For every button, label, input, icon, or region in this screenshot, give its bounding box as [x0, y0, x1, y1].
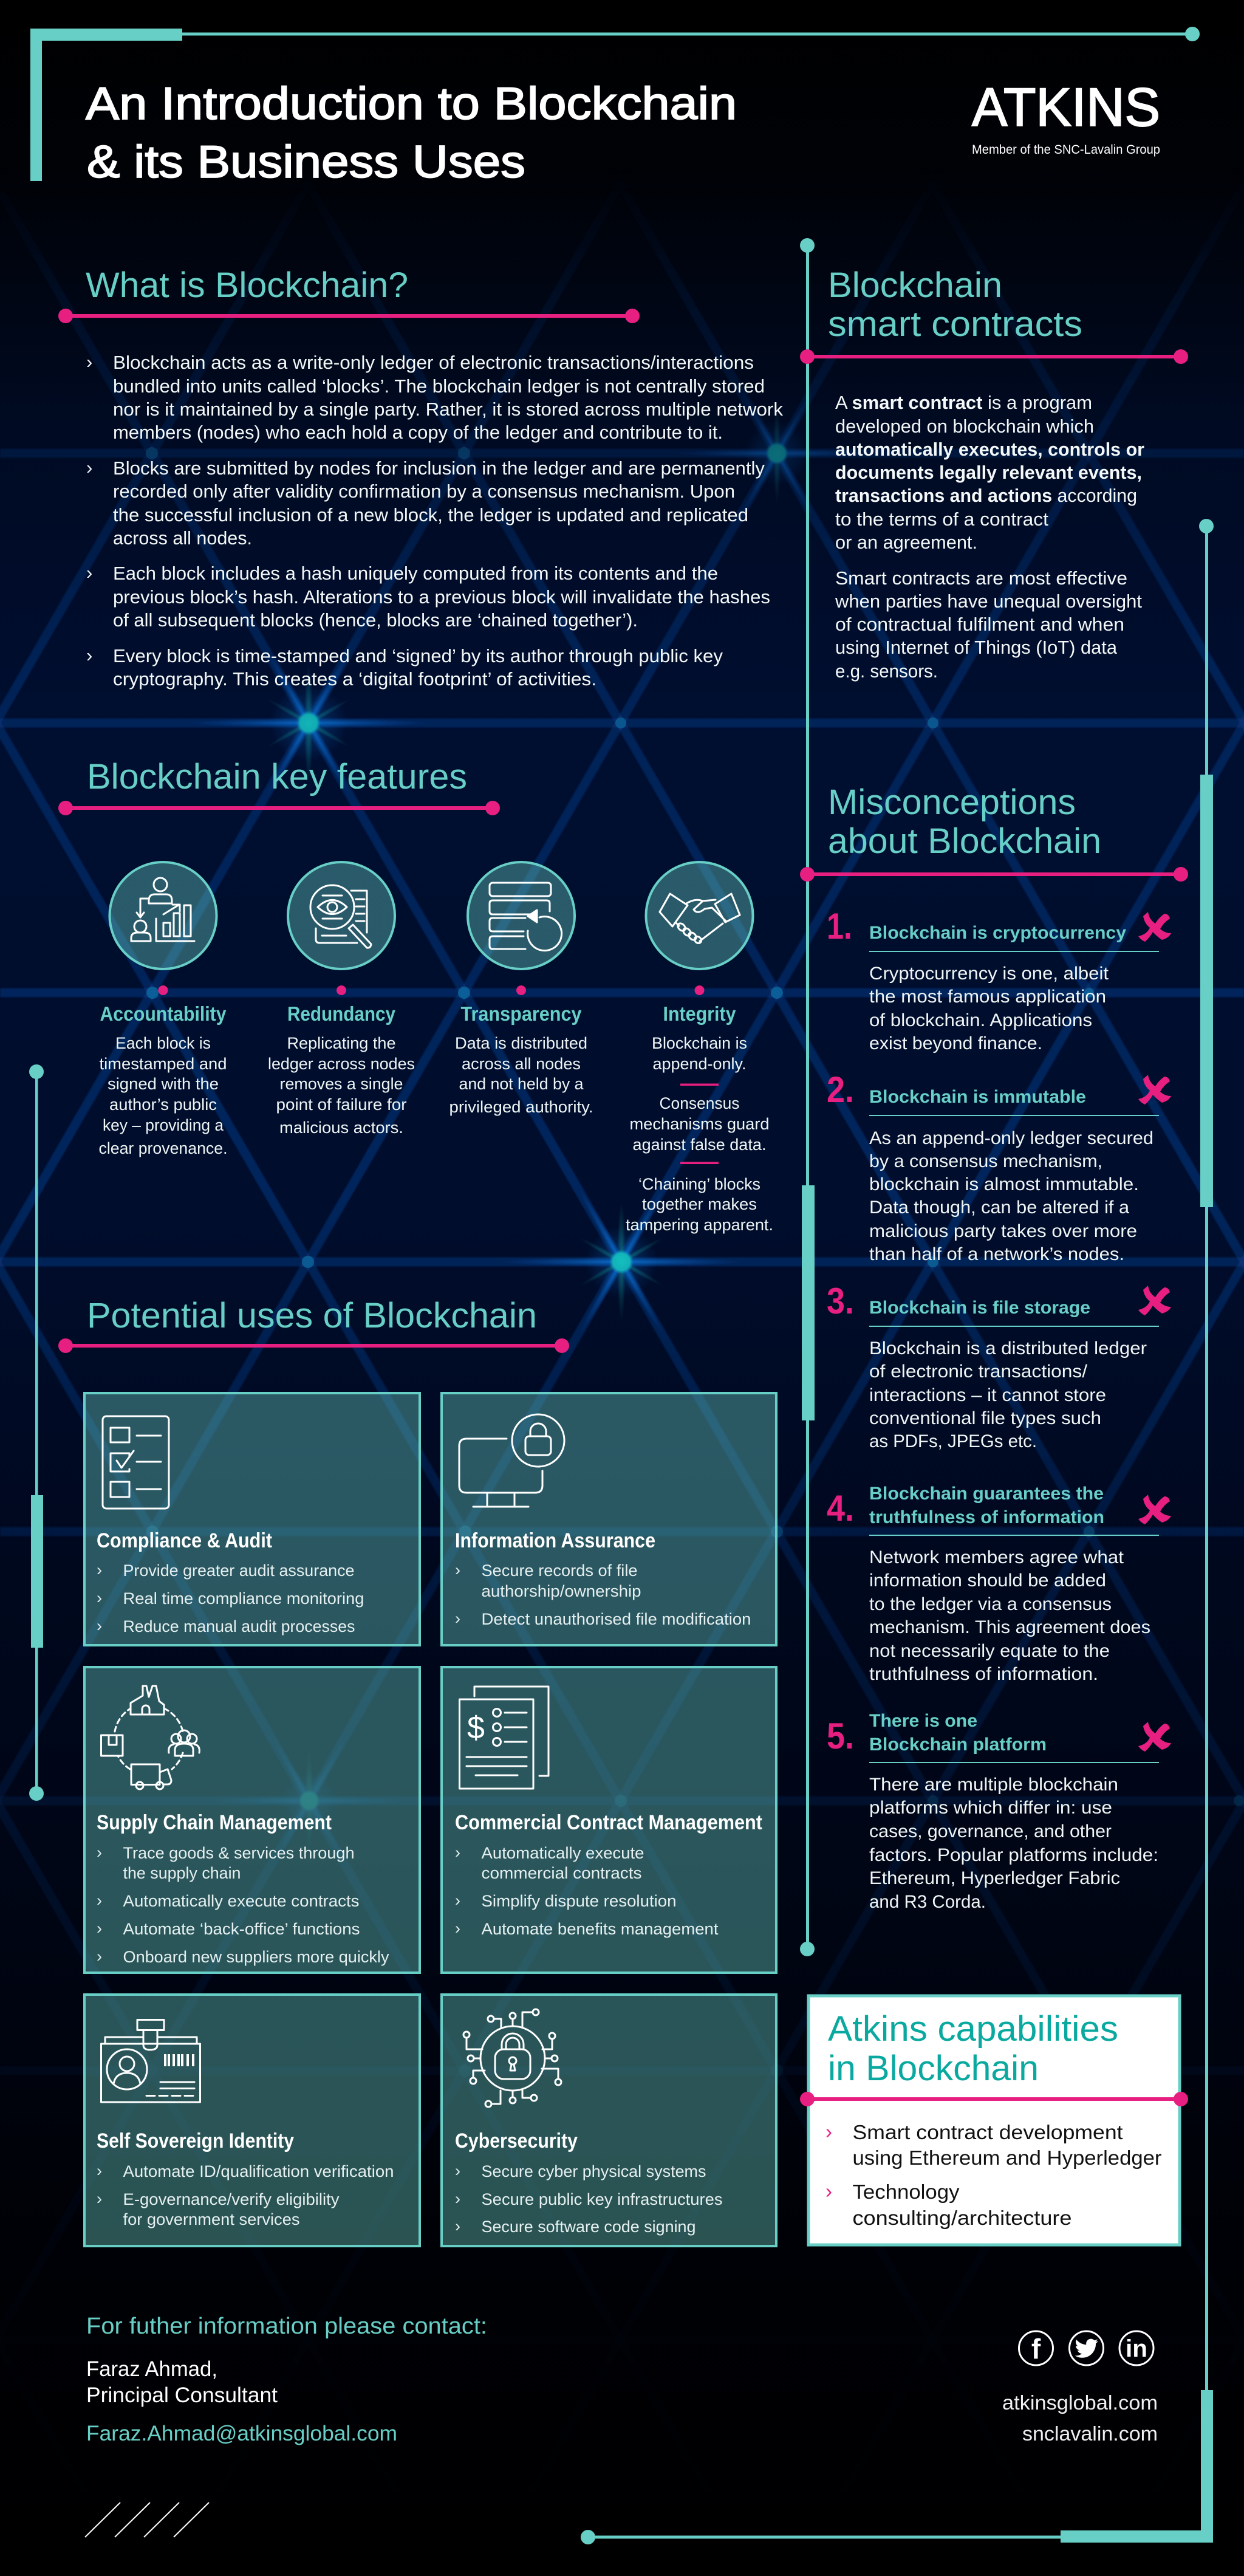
icon: cross	[1138, 1286, 1171, 1315]
item text: interactions – it cannot store	[869, 1385, 1106, 1405]
item text	[869, 1775, 1158, 1912]
number: 3.	[827, 1281, 854, 1321]
icon: accountability circle	[109, 862, 216, 969]
decorative slashes	[85, 2502, 209, 2537]
icon: monitor with lock	[459, 1414, 564, 1507]
item text: not necessarily equate to the	[869, 1641, 1110, 1661]
list: ›	[97, 2190, 102, 2208]
title: Cybersecurity	[455, 2129, 578, 2153]
list: Secure software code signing	[481, 2218, 696, 2236]
list: Secure cyber physical systems	[481, 2162, 706, 2180]
misconception 5	[827, 1711, 1171, 1912]
marker dot	[158, 985, 168, 995]
feature: Integrity	[626, 862, 773, 1234]
item text: mechanism. This agreement does	[869, 1617, 1150, 1637]
text block: smart contracts: automatically executes, controls or	[835, 439, 1144, 460]
text block: What is Blockchain: ›	[86, 562, 92, 583]
list: Reduce manual audit processes	[123, 1617, 355, 1636]
text block: timestamped and	[100, 1055, 227, 1073]
item heading	[869, 1711, 1047, 1755]
text block: author’s public	[109, 1095, 217, 1114]
text block: tampering apparent.	[626, 1216, 773, 1234]
title: Self Sovereign Identity	[97, 2129, 294, 2153]
frame: bottom right corner and line	[581, 2390, 1213, 2544]
rule: key features	[58, 801, 500, 815]
list	[455, 2162, 723, 2236]
text block: smart contracts: transactions and actions according	[835, 485, 1137, 506]
title: Redundancy	[287, 1002, 396, 1025]
text block: smart contracts: or an agreement.	[835, 532, 977, 553]
text block: across all nodes	[462, 1055, 581, 1073]
list: Automatically execute	[481, 1844, 644, 1862]
marker dot	[695, 985, 705, 995]
contact name	[86, 2357, 278, 2407]
icon: cross	[1138, 912, 1171, 942]
logo: Atkins: ATKINS	[972, 77, 1160, 137]
heading	[828, 2009, 1118, 2088]
number: 4.	[827, 1488, 854, 1529]
text block: What is Blockchain: recorded only after validity confirmation by a consensus mechanism. Upon	[113, 481, 735, 502]
rule: smart contracts	[800, 349, 1188, 364]
list: Real time compliance monitoring	[123, 1589, 364, 1608]
item text	[869, 964, 1109, 1053]
list: ›	[97, 1617, 102, 1635]
title: Compliance & Audit	[97, 1529, 272, 1552]
item text: information should be added	[869, 1571, 1106, 1591]
text block: ledger across nodes	[268, 1055, 415, 1073]
heading: Potential uses of Blockchain: Potential uses of Blockchain	[87, 1296, 537, 1335]
web addresses	[1002, 2391, 1158, 2445]
text block: smart contracts: developed on blockchain which	[835, 416, 1094, 437]
heading: What is Blockchain?: What is Blockchain?	[86, 265, 408, 305]
title: An Introduction to Blockchain	[86, 78, 737, 129]
list: authorship/ownership	[481, 1582, 641, 1600]
panel: Compliance & Audit	[84, 1393, 420, 1645]
item text: blockchain is almost immutable.	[869, 1174, 1139, 1194]
text block: append-only.	[652, 1055, 746, 1073]
text block: point of failure for	[276, 1095, 407, 1114]
text block: smart contracts	[835, 392, 1144, 682]
text block	[449, 1034, 593, 1116]
list: ›	[97, 1843, 102, 1862]
text block: What is Blockchain: Blockchain acts as a write-only ledger of electronic transactions/interactions	[113, 352, 754, 373]
list: Smart contract development	[853, 2121, 1123, 2143]
heading: Blockchain smart contracts	[828, 265, 1082, 344]
contact block	[86, 2314, 487, 2445]
list: ›	[455, 1561, 460, 1579]
icon: contract document	[459, 1687, 549, 1789]
text block: What is Blockchain: ›	[86, 351, 92, 372]
contact heading: For futher information please contact:	[86, 2314, 487, 2339]
icon: checklist	[103, 1416, 169, 1509]
list: Automatically execute contracts	[123, 1892, 360, 1910]
item text: Cryptocurrency is one, albeit	[869, 964, 1109, 984]
icon: linkedin	[1119, 2331, 1153, 2365]
text block	[268, 1034, 415, 1137]
icon: circuit padlock	[463, 2009, 561, 2107]
item text: the most famous application	[869, 987, 1106, 1007]
text block: key – providing a	[103, 1116, 224, 1134]
icon: facebook: f	[1031, 2333, 1041, 2365]
text block: What is Blockchain	[86, 351, 784, 690]
item heading: Blockchain is cryptocurrency	[869, 923, 1126, 943]
icon: transparency circle	[468, 862, 575, 969]
misconception 3	[827, 1281, 1171, 1451]
number: 1.	[827, 906, 852, 947]
misconception 4	[827, 1484, 1171, 1684]
rule: potential uses	[58, 1338, 569, 1353]
list: ›	[97, 1589, 102, 1607]
item heading	[869, 1484, 1104, 1527]
text block: signed with the	[108, 1075, 219, 1093]
text block: smart contracts: documents legally relevant events,	[835, 462, 1142, 483]
item text: Ethereum, Hyperledger Fabric	[869, 1868, 1120, 1888]
icon: cross	[1138, 1075, 1171, 1105]
item text	[869, 1338, 1147, 1451]
item text: and R3 Corda.	[869, 1892, 986, 1912]
list: ›	[455, 2190, 460, 2208]
contact name: Principal Consultant	[86, 2383, 278, 2407]
side line: right column left rail	[800, 238, 815, 1956]
item heading: Blockchain guarantees the	[869, 1484, 1104, 1504]
item text	[869, 1128, 1153, 1264]
list: Automate ‘back-office’ functions	[123, 1920, 360, 1938]
item text: by a consensus mechanism,	[869, 1151, 1102, 1171]
list: ›	[455, 1919, 460, 1937]
heading: Misconceptions about Blockchain	[828, 783, 1101, 861]
list: Automate ID/qualification verification	[123, 2162, 394, 2180]
list: ›	[97, 1947, 102, 1965]
icon: supply chain cycle	[101, 1686, 199, 1789]
feature: Transparency	[449, 862, 593, 1116]
item text: Network members agree what	[869, 1547, 1124, 1567]
list: for government services	[123, 2210, 300, 2228]
misconception 2	[827, 1069, 1171, 1264]
icon: cross	[1138, 1495, 1171, 1524]
title: Transparency	[460, 1002, 582, 1025]
frame: top left corner and line	[30, 27, 1200, 181]
title: Information Assurance	[455, 1529, 655, 1552]
text block: What is Blockchain: nor is it maintained by a single party. Rather, it is stored across multiple network	[113, 399, 784, 420]
text block: What is Blockchain: Every block is time-stamped and ‘signed’ by its author through public key	[113, 645, 723, 666]
icon: redundancy circle	[288, 862, 395, 969]
list: Simplify dispute resolution	[481, 1892, 677, 1910]
text block: What is Blockchain: Each block includes a hash uniquely computed from its contents and the	[113, 563, 718, 584]
side line: left rail	[29, 1064, 44, 1801]
number: 2.	[827, 1069, 854, 1110]
list: ›	[97, 2162, 102, 2180]
list	[825, 2120, 1161, 2229]
list: the supply chain	[123, 1864, 241, 1882]
list: ›	[455, 2217, 460, 2235]
item heading: Blockchain is file storage	[869, 1298, 1090, 1318]
list: Detect unauthorised file modification	[481, 1610, 751, 1628]
item text: cases, governance, and other	[869, 1821, 1112, 1841]
rule: misconceptions	[800, 867, 1188, 882]
text block: smart contracts: A smart contract is a program	[835, 392, 1092, 413]
item text: exist beyond finance.	[869, 1033, 1042, 1053]
text block: What is Blockchain: bundled into units called ‘blocks’. The blockchain ledger is not centrally stored	[113, 375, 765, 397]
list: ›	[455, 1609, 460, 1628]
contact name: Faraz Ahmad,	[86, 2357, 217, 2381]
misconception 1	[827, 906, 1171, 1053]
feature: Accountability	[98, 862, 227, 1157]
logo: Atkins: Member of the SNC-Lavalin Group	[972, 143, 1160, 157]
list: E-governance/verify eligibility	[123, 2190, 340, 2208]
text block: What is Blockchain: members (nodes) who each hold a copy of the ledger and contribute to it.	[113, 422, 723, 443]
item text: than half of a network’s nodes.	[869, 1244, 1124, 1264]
heading: in Blockchain	[828, 2049, 1039, 2088]
panel: Self Sovereign Identity	[84, 1995, 420, 2246]
web addresses: atkinsglobal.com	[1002, 2391, 1158, 2414]
heading: Blockchain key features: Blockchain key features	[87, 757, 467, 796]
marker dot	[337, 985, 346, 995]
web addresses: snclavalin.com	[1022, 2422, 1158, 2445]
text block: What is Blockchain: the successful inclusion of a new block, the ledger is updated and replicated	[113, 504, 748, 526]
item heading: Blockchain is immutable	[869, 1087, 1086, 1107]
list: ›	[97, 1561, 102, 1579]
item heading: Blockchain platform	[869, 1735, 1047, 1755]
list	[455, 1561, 751, 1628]
text block: smart contracts: to the terms of a contract	[835, 509, 1048, 530]
rule: What is Blockchain	[58, 309, 640, 323]
heading: Misconceptions about Blockchain: Misconceptions	[828, 783, 1076, 822]
item text	[869, 1547, 1150, 1684]
text block: malicious actors.	[279, 1118, 403, 1137]
text block: What is Blockchain: previous block’s hash. Alterations to a previous block will invalidate the hashes	[113, 586, 770, 608]
panel: Information Assurance	[442, 1393, 776, 1645]
text block: smart contracts: of contractual fulfilment and when	[835, 614, 1124, 635]
icon: twitter	[1069, 2331, 1103, 2365]
background: star glints	[187, 388, 880, 1866]
list: commercial contracts	[481, 1864, 641, 1882]
text block: Replicating the	[287, 1034, 396, 1052]
panel: Commercial Contract Management	[442, 1667, 776, 1973]
text block: smart contracts: when parties have unequal oversight	[835, 591, 1142, 612]
contact email: Faraz.Ahmad@atkinsglobal.com	[86, 2422, 397, 2445]
text block: ‘Chaining’ blocks	[638, 1175, 760, 1193]
text block: mechanisms guard	[629, 1115, 769, 1133]
list	[97, 1561, 364, 1636]
item text: of blockchain. Applications	[869, 1010, 1092, 1030]
icon: facebook	[1019, 2331, 1053, 2365]
text block: What is Blockchain: Blocks are submitted by nodes for inclusion in the ledger and are permanently	[113, 457, 765, 479]
list	[97, 1843, 389, 1966]
icon: id card	[101, 2019, 200, 2102]
text block: clear provenance.	[98, 1139, 227, 1157]
heading: Blockchain smart contracts: smart contracts	[828, 304, 1082, 344]
text block: Data is distributed	[455, 1034, 587, 1052]
item heading: There is one	[869, 1711, 977, 1731]
list	[455, 1843, 719, 1938]
list: ›	[825, 2180, 832, 2202]
list: Trace goods & services through	[123, 1844, 355, 1862]
text block: Blockchain is	[652, 1034, 747, 1052]
title: & its Business Uses	[87, 136, 525, 187]
heading: Atkins capabilities	[828, 2009, 1118, 2049]
text block: What is Blockchain: of all subsequent blocks (hence, blocks are ‘chained together’).	[113, 609, 638, 631]
text block: What is Blockchain: cryptography. This creates a ‘digital footprint’ of activities.	[113, 668, 596, 690]
text block: removes a single	[279, 1075, 403, 1093]
panel: Atkins capabilities	[800, 1996, 1188, 2245]
title	[86, 78, 737, 187]
item text: platforms which differ in: use	[869, 1798, 1112, 1818]
panel: Cybersecurity	[442, 1995, 776, 2246]
number: 5.	[827, 1716, 854, 1756]
item heading: truthfulness of information	[869, 1507, 1104, 1527]
list: Secure public key infrastructures	[481, 2190, 723, 2208]
title: Accountability	[100, 1002, 227, 1025]
text block: smart contracts: e.g. sensors.	[835, 660, 938, 682]
heading: Blockchain smart contracts: Blockchain	[828, 265, 1002, 305]
list	[97, 2162, 394, 2228]
list: Automate benefits management	[481, 1920, 719, 1938]
list: ›	[455, 1843, 460, 1862]
text block	[98, 1034, 227, 1157]
list: ›	[97, 1919, 102, 1937]
list: ›	[825, 2120, 832, 2143]
text block: together makes	[642, 1195, 757, 1213]
item text: malicious party takes over more	[869, 1221, 1137, 1241]
list: consulting/architecture	[853, 2207, 1071, 2229]
title: Commercial Contract Management	[455, 1811, 762, 1834]
text block	[626, 1034, 773, 1234]
text block: against false data.	[633, 1136, 767, 1154]
item text: Data though, can be altered if a	[869, 1197, 1129, 1218]
item text: factors. Popular platforms include:	[869, 1845, 1158, 1865]
list: ›	[455, 1891, 460, 1910]
item text: truthfulness of information.	[869, 1664, 1098, 1684]
item text: conventional file types such	[869, 1408, 1101, 1428]
text block: What is Blockchain: ›	[86, 457, 92, 478]
icon: integrity circle	[646, 862, 753, 969]
list: Provide greater audit assurance	[123, 1561, 355, 1580]
text block: Each block is	[115, 1034, 211, 1052]
list: using Ethereum and Hyperledger	[853, 2146, 1161, 2169]
title: Supply Chain Management	[97, 1811, 332, 1834]
item text: to the ledger via a consensus	[869, 1594, 1112, 1614]
text block: What is Blockchain: ›	[86, 645, 92, 666]
item text: As an append-only ledger secured	[869, 1128, 1153, 1148]
list: Secure records of file	[481, 1561, 638, 1580]
text block: smart contracts: using Internet of Things (IoT) data	[835, 637, 1118, 658]
side line: right edge rail	[1199, 519, 1214, 2410]
marker dot	[516, 985, 526, 995]
list: ›	[97, 1891, 102, 1910]
text block: and not held by a	[459, 1075, 584, 1093]
title: Integrity	[663, 1002, 736, 1025]
text block: privileged authority.	[449, 1098, 593, 1116]
background: triangle network	[0, 234, 1244, 2152]
social icons	[1019, 2331, 1153, 2365]
text block: Consensus	[660, 1094, 740, 1112]
panel: Supply Chain Management	[84, 1667, 420, 1973]
item text: There are multiple blockchain	[869, 1775, 1118, 1795]
feature: Redundancy	[268, 862, 415, 1137]
heading: Misconceptions about Blockchain: about Blockchain	[828, 821, 1101, 861]
rule	[800, 2092, 1188, 2106]
item text: of electronic transactions/	[869, 1362, 1088, 1382]
list: ›	[455, 2162, 460, 2180]
list: Technology	[853, 2180, 960, 2203]
icon: linkedin: in	[1126, 2335, 1147, 2362]
item text: Blockchain is a distributed ledger	[869, 1338, 1147, 1358]
list: Onboard new suppliers more quickly	[123, 1948, 389, 1966]
item text: as PDFs, JPEGs etc.	[869, 1431, 1037, 1451]
text block: smart contracts: Smart contracts are most effective	[835, 567, 1127, 589]
text block: What is Blockchain: across all nodes.	[113, 527, 252, 549]
icon: dollar sign: $	[467, 1710, 485, 1745]
icon: cross	[1138, 1722, 1171, 1752]
